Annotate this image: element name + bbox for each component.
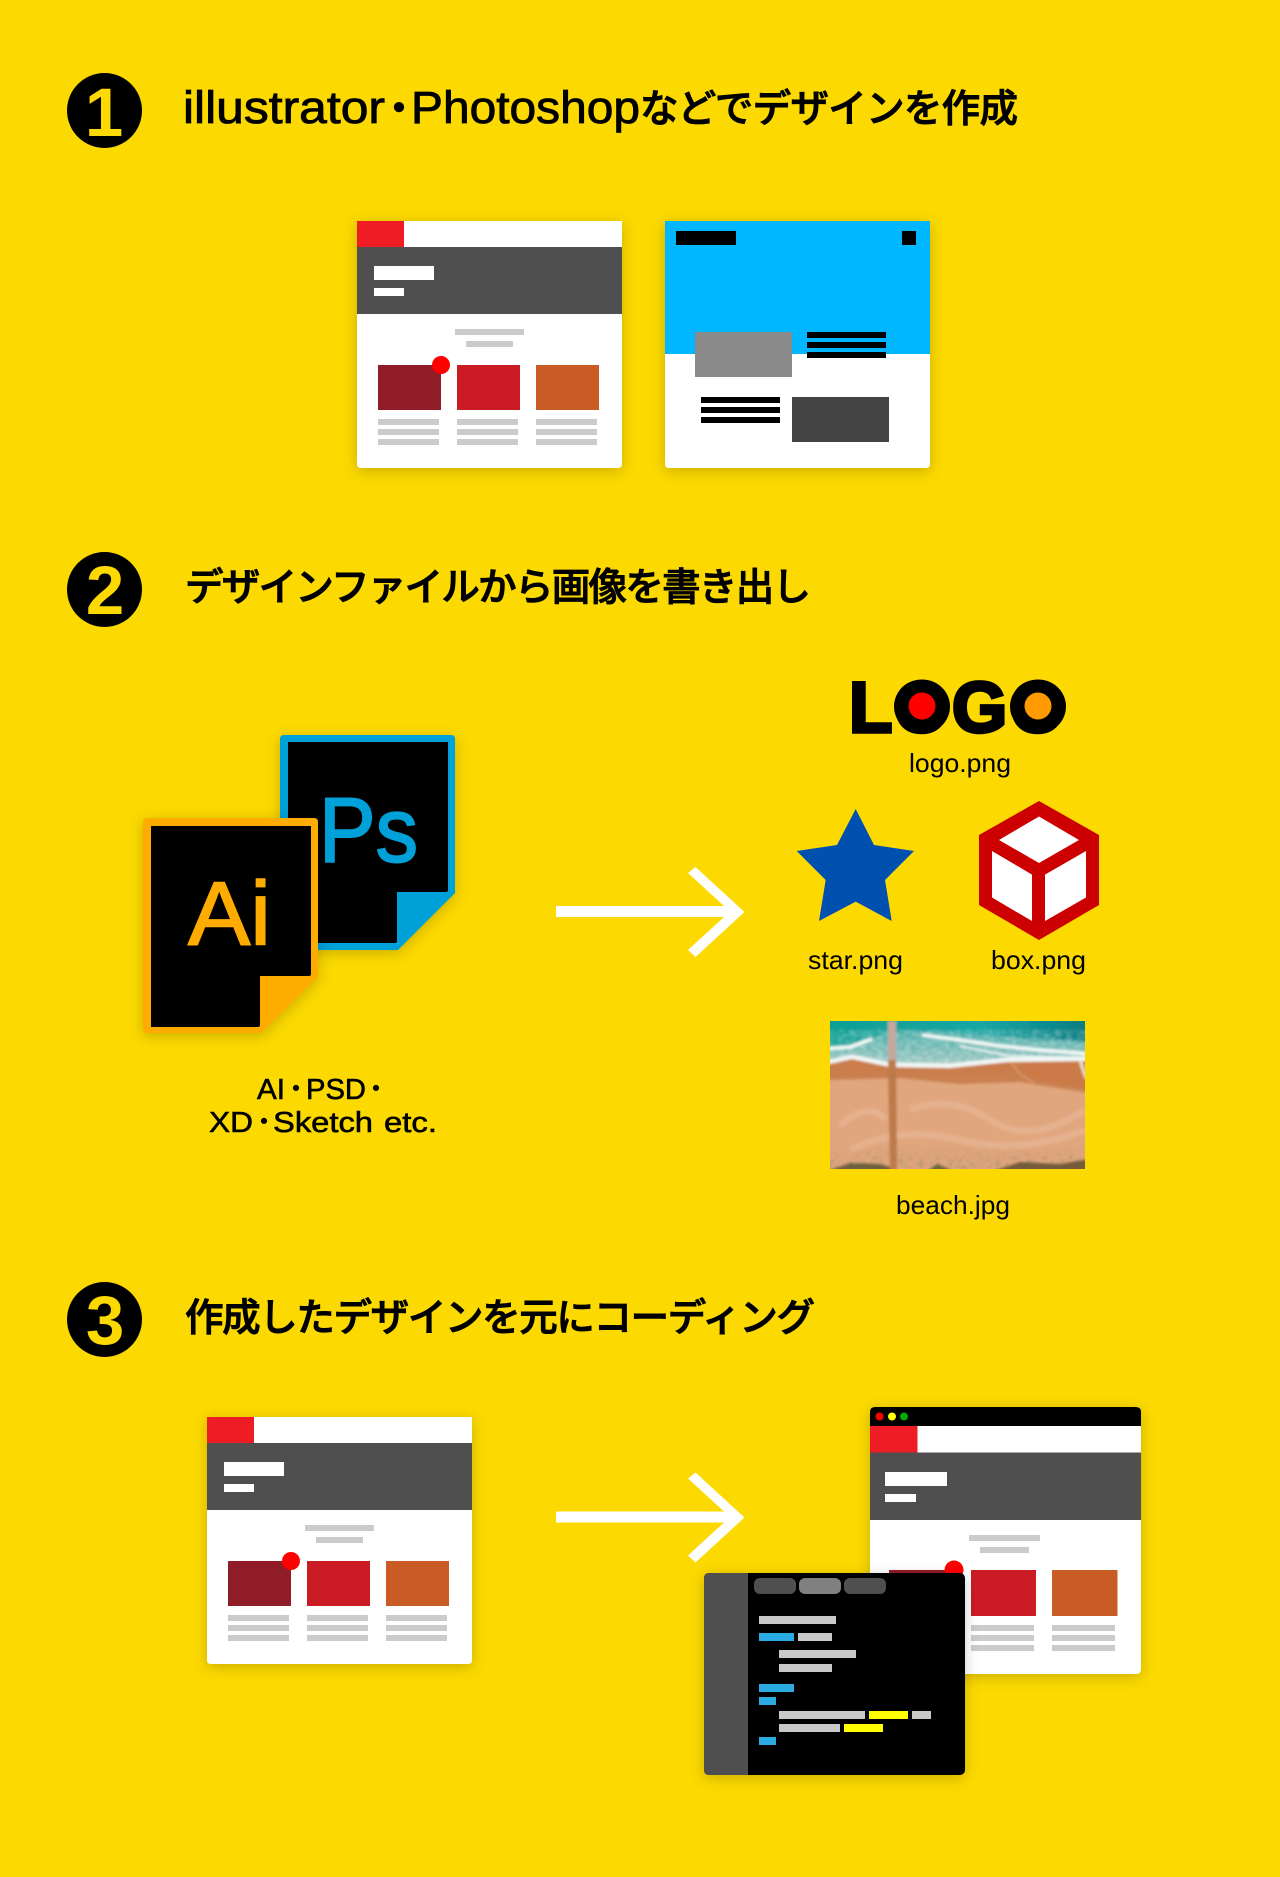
image: logo: O [1010, 669, 1065, 748]
file format label: ・ [250, 1107, 279, 1139]
text line placeholders [228, 1615, 447, 1641]
text lines right [807, 332, 886, 358]
icon: Illustrator file [143, 818, 318, 1033]
image: blue star [797, 809, 914, 921]
file format label: XD [209, 1107, 253, 1139]
filename: box: box.png [991, 945, 1086, 975]
file format label: ・ [362, 1074, 391, 1106]
logo block [870, 1426, 918, 1452]
step 1 heading: Photoshop [411, 82, 640, 133]
hero band [207, 1443, 472, 1510]
panel: design to code from [207, 1417, 472, 1664]
section heading placeholder [305, 1525, 374, 1543]
nav blocks [676, 231, 916, 245]
filename: star: star.png [808, 945, 903, 975]
blue hero [665, 221, 930, 354]
icon: Illustrator file: Ai [188, 864, 271, 964]
file format label [209, 1074, 437, 1139]
step 2 heading: デザインファイルから画像を書き出し [185, 566, 811, 610]
text line placeholders [971, 1625, 1115, 1651]
panel: code editor window [704, 1573, 965, 1775]
step 1 heading [183, 82, 1018, 133]
step 1 number badge: 1 [85, 74, 123, 151]
arrow: design to coded result [556, 1472, 744, 1562]
section heading placeholder [455, 329, 524, 347]
step 1 heading: などでデザインを作成 [640, 88, 1018, 131]
logo block [357, 221, 404, 247]
browser title bar [870, 1407, 1141, 1426]
dark image block [792, 397, 889, 442]
file format label: ・ [282, 1074, 311, 1106]
image: logo: L [849, 669, 892, 748]
file format label: etc. [384, 1107, 437, 1139]
three colour cards [378, 356, 599, 410]
step 2 number badge: 2 [86, 552, 124, 629]
file format label: Sketch [273, 1107, 373, 1139]
image: beach photo [830, 1021, 1085, 1169]
file format label: PSD [306, 1074, 366, 1106]
hero band [357, 247, 622, 314]
icon: Photoshop file [280, 735, 455, 950]
step 1 heading: illustrator [183, 82, 385, 133]
arrow: files to exported images [556, 867, 744, 957]
editor tabs [754, 1578, 886, 1594]
image: logo: O [894, 669, 949, 748]
filename: logo: logo.png [909, 748, 1011, 778]
editor sidebar [704, 1573, 748, 1775]
logo block [207, 1417, 254, 1443]
code lines [759, 1616, 931, 1745]
step 1 heading: ・ [379, 87, 419, 131]
step 1 number badge [67, 73, 142, 151]
colour cards [889, 1560, 1118, 1616]
step 3 number badge: 3 [86, 1282, 124, 1359]
gray image block [695, 332, 792, 377]
panel: page design mockup B [665, 221, 930, 468]
step 3 heading: 作成したデザインを元にコーディング [185, 1297, 815, 1340]
text lines left [701, 397, 780, 423]
three colour cards [228, 1552, 449, 1606]
image: red box [979, 801, 1099, 940]
step 3 number badge [67, 1282, 142, 1359]
image: logo [849, 669, 1066, 748]
file format label: AI [257, 1074, 285, 1106]
step 2 number badge [67, 552, 142, 629]
hero band [870, 1452, 1141, 1520]
filename: beach: beach.jpg [896, 1190, 1010, 1220]
panel: browser window [870, 1407, 1141, 1674]
section heading placeholder [969, 1535, 1040, 1553]
icon: Photoshop file: Ps [319, 780, 418, 882]
image: logo: G [952, 669, 1007, 748]
text line placeholders [378, 419, 597, 445]
panel: page design mockup A [357, 221, 622, 468]
